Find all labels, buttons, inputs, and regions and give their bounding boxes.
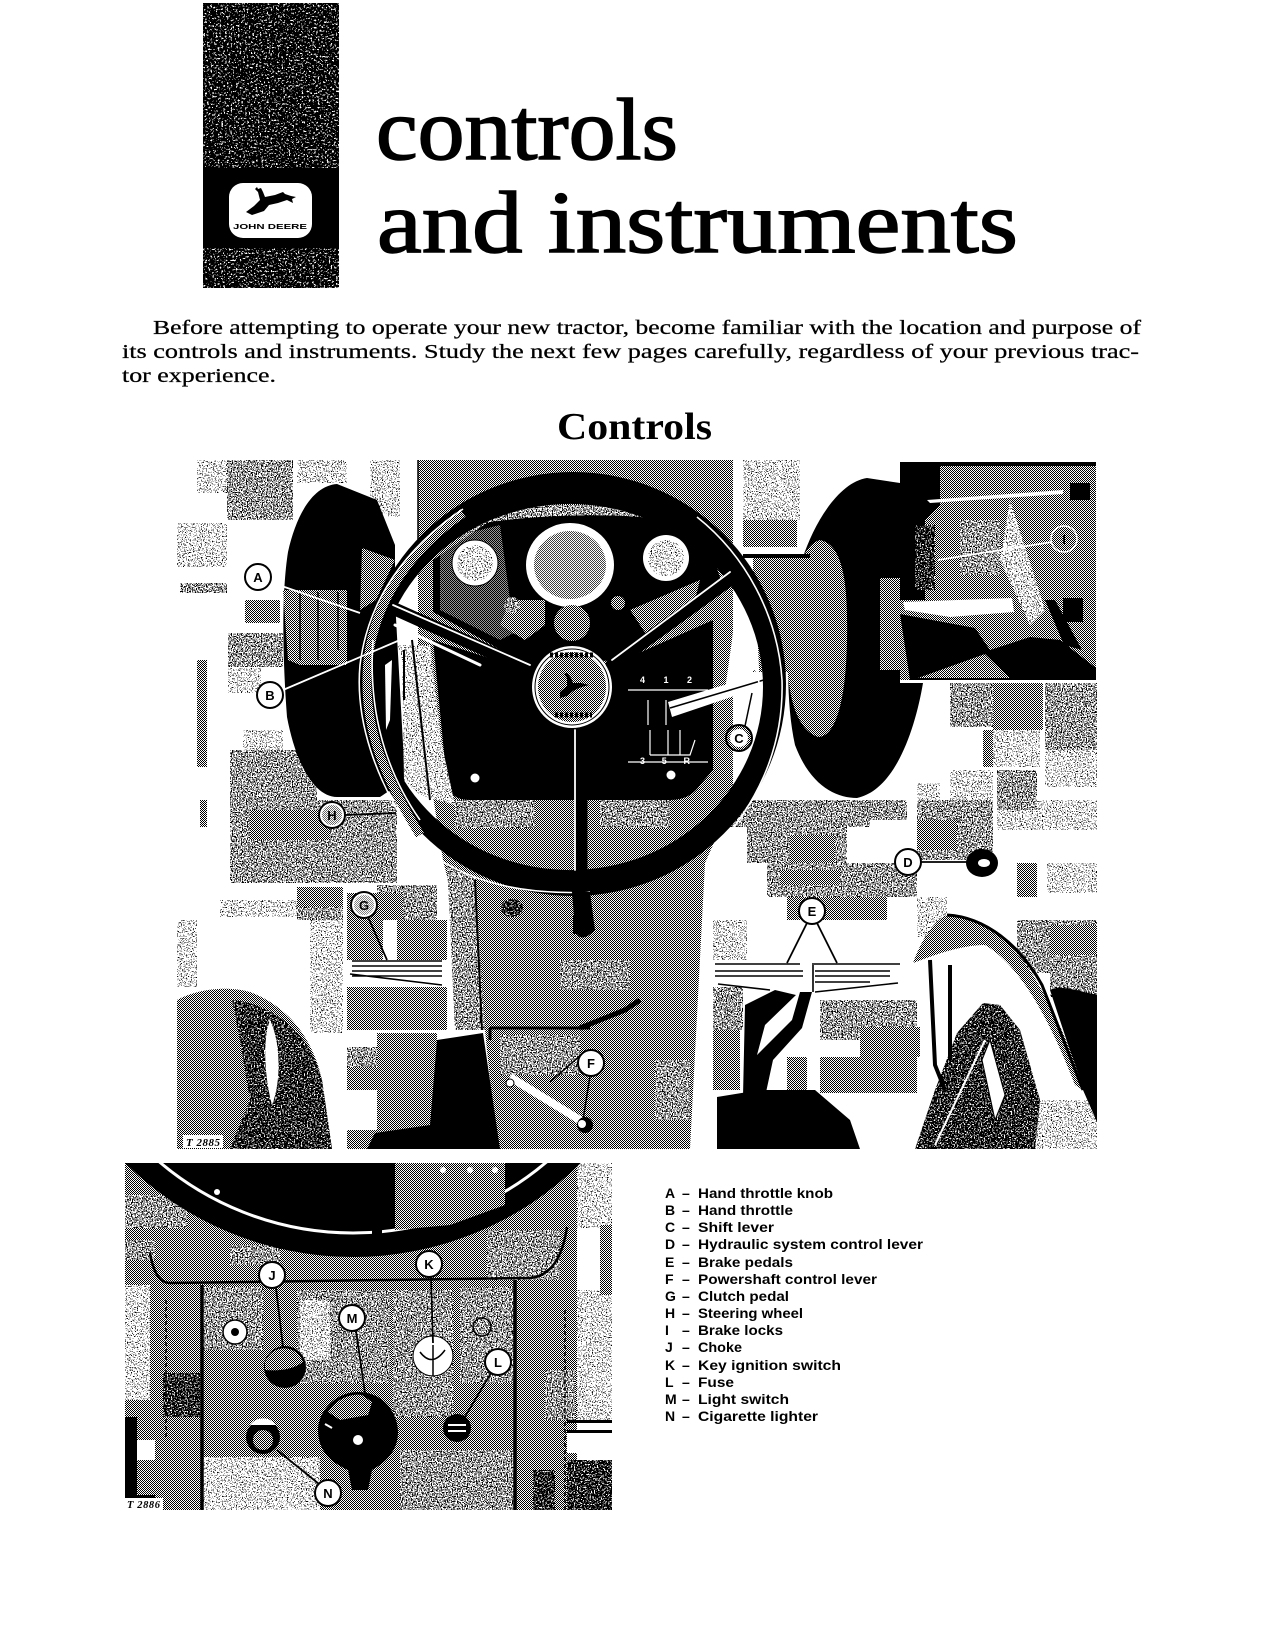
callout I: I [1062, 532, 1066, 547]
legend: control key list: Hydraulic system control lever [698, 1236, 924, 1252]
legend: control key list: Powershaft control lever [698, 1271, 878, 1287]
callout I [938, 526, 1077, 560]
icon: lower dash panel [433, 620, 713, 800]
callout D [895, 849, 967, 875]
legend: control key list: F [665, 1271, 674, 1287]
callout N: N [323, 1486, 333, 1501]
legend: control key list: – [682, 1202, 690, 1218]
icon: left tire [283, 484, 405, 797]
dark corners [163, 1373, 200, 1417]
callout G: G [359, 898, 369, 913]
icon: steering wheel [359, 472, 786, 938]
icon: seat and fender [717, 849, 1097, 1149]
callout E: E [808, 904, 817, 919]
white slivers inside wheel [398, 645, 455, 805]
intro text block: its controls and instruments. Study the next few pages carefully, regardless of your previous trac- [122, 341, 1139, 363]
legend: control key list: Hand throttle knob [698, 1185, 833, 1201]
white wedge at centre left [345, 885, 347, 1149]
legend: control key list: Hand throttle [698, 1202, 793, 1218]
checker grey blocks [197, 520, 1097, 1149]
legend: control key list: Key ignition switch [698, 1357, 841, 1373]
callout E [787, 898, 837, 963]
screw fitting below wheel [501, 899, 523, 917]
icon: shift pattern and lever [470, 672, 767, 782]
icon: shift pattern and lever: 4 1 2 [640, 675, 692, 685]
hood and steering column [418, 460, 733, 1149]
callout M: M [347, 1311, 357, 1326]
icon: light switch knob [318, 1392, 398, 1490]
legend: control key list: A [665, 1185, 675, 1201]
photo code: T 2885: T 2885 [186, 1137, 220, 1149]
legend: control key list: Fuse [698, 1374, 734, 1390]
legend: control key list: – [682, 1322, 690, 1338]
legend: control key list: – [682, 1271, 690, 1287]
callout C [726, 693, 752, 751]
legend: control key list: N [665, 1408, 675, 1424]
callout G [351, 892, 387, 960]
photo: dash close-up inset [125, 1163, 612, 1510]
intro text block: tor experience. [122, 365, 276, 387]
pale speckled patches [125, 1195, 575, 1510]
callout K: K [424, 1257, 434, 1272]
white patches on column [455, 800, 690, 1120]
callout J [259, 1262, 285, 1347]
legend: control key list [665, 1185, 924, 1424]
legend: control key list: – [682, 1408, 690, 1424]
callout C: C [734, 731, 744, 746]
callout F [550, 1050, 604, 1120]
legend: control key list: – [682, 1357, 690, 1373]
legend: control key list: – [682, 1219, 690, 1235]
legend: control key list: Light switch [698, 1391, 789, 1407]
callout F: F [587, 1056, 595, 1071]
title: controls [376, 82, 678, 179]
legend: control key list: B [665, 1202, 675, 1218]
callout B: B [265, 688, 275, 703]
icon: John Deere logo [229, 183, 312, 238]
icon: upper dash with gauges [433, 505, 722, 668]
photo: tractor controls main view [177, 460, 1097, 1158]
icon: choke knob [264, 1346, 306, 1388]
legend: control key list: – [682, 1288, 690, 1304]
callout B [257, 637, 407, 708]
title: and instruments [377, 175, 1018, 272]
wheel hub with emblem [532, 646, 612, 728]
heading: Controls: Controls [557, 406, 712, 448]
callout L [463, 1349, 511, 1420]
legend: control key list: Brake pedals [698, 1254, 793, 1270]
intro text block [122, 317, 1141, 387]
legend: control key list: – [682, 1391, 690, 1407]
icon: brake pedals [715, 963, 900, 1097]
callout N [277, 1450, 341, 1506]
callout A: A [253, 570, 263, 585]
legend: control key list: M [665, 1391, 677, 1407]
wheel spokes [393, 572, 732, 880]
callout J: J [268, 1268, 276, 1283]
callout H: H [327, 808, 337, 823]
legend: control key list: C [665, 1219, 675, 1235]
icon: shift pattern and lever: 3 5 R [640, 756, 690, 766]
legend: control key list: D [665, 1236, 675, 1252]
legend: control key list: Cigarette lighter [698, 1408, 819, 1424]
icon: right tire [788, 478, 923, 798]
medium speckle background blocks [180, 460, 1097, 1067]
icon: cigarette lighter [246, 1418, 280, 1454]
legend: control key list: Steering wheel [698, 1305, 803, 1321]
icon: fuse [443, 1414, 471, 1442]
sidebar: textured band with logo [203, 3, 339, 288]
icon: key ignition switch [413, 1336, 453, 1376]
legend: control key list: I [665, 1322, 669, 1338]
photo inset: brake locks [900, 462, 1096, 680]
legend: control key list: E [665, 1254, 674, 1270]
legend: control key list: L [665, 1374, 674, 1390]
legend: control key list: – [682, 1374, 690, 1390]
icon: John Deere logo: JOHN DEERE [233, 222, 307, 231]
legend: control key list: Shift lever [698, 1219, 775, 1235]
legend: control key list: Choke [698, 1339, 742, 1355]
callout H [319, 802, 396, 828]
photo code: T 2886: T 2886 [127, 1500, 161, 1511]
legend: control key list: – [682, 1305, 690, 1321]
callout L: L [494, 1355, 502, 1370]
icon: bottom-left tire [177, 989, 332, 1149]
title [376, 82, 1018, 272]
callout K [416, 1251, 442, 1343]
callout M [339, 1305, 365, 1393]
legend: control key list: – [682, 1236, 690, 1252]
icon: steering wheel arc [126, 1163, 581, 1257]
legend: control key list: – [682, 1185, 690, 1201]
legend: control key list: K [665, 1357, 675, 1373]
legend: control key list: – [682, 1339, 690, 1355]
callout A [245, 564, 360, 613]
intro text block: Before attempting to operate your new tractor, become familiar with the location and purpose of [153, 317, 1141, 339]
legend: control key list: Brake locks [698, 1322, 783, 1338]
legend: control key list: H [665, 1305, 675, 1321]
legend: control key list: – [682, 1254, 690, 1270]
panel edge and rails [150, 1227, 567, 1283]
legend: control key list: G [665, 1288, 676, 1304]
legend: control key list: Clutch pedal [698, 1288, 789, 1304]
icon: clutch pedal [350, 960, 443, 985]
light speckle background blocks [177, 460, 1097, 1158]
dark pillar and lower column [367, 1033, 500, 1149]
legend: control key list: J [665, 1339, 673, 1355]
right margin speckle [125, 1163, 612, 1420]
callout D: D [903, 855, 913, 870]
icon: screws [223, 1318, 491, 1344]
